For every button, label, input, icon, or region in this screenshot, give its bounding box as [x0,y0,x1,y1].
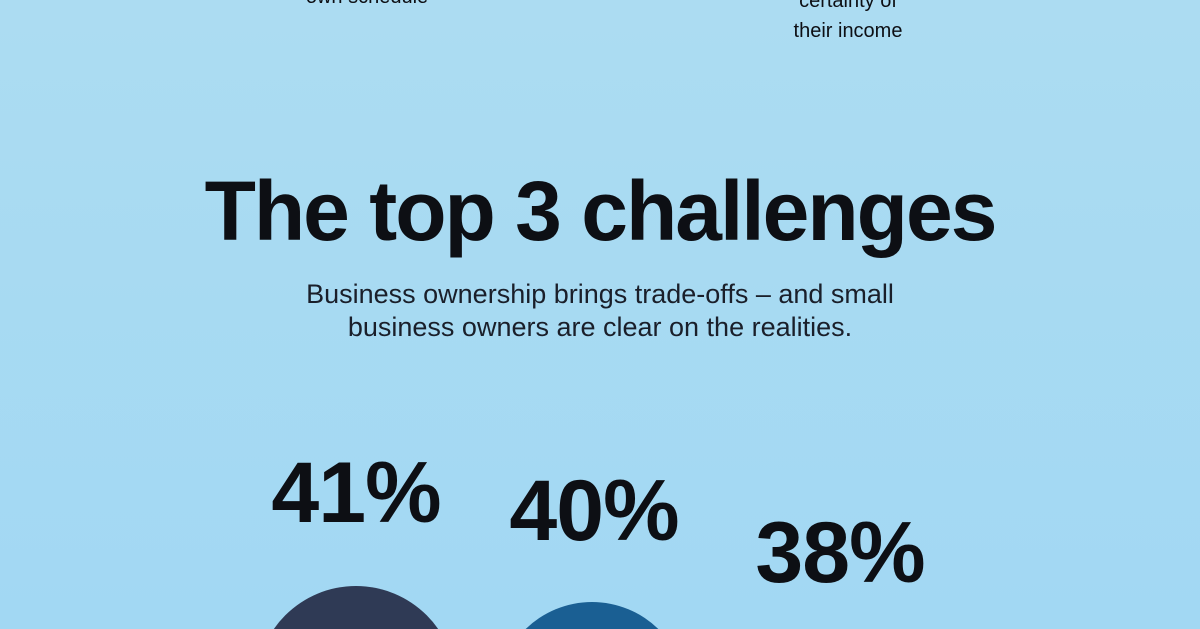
stat 41%: 41% [271,445,441,541]
title: The top 3 challenges [205,164,995,258]
circle blue [497,602,687,629]
circle navy [256,586,456,629]
text: certainty of their income: their income [794,20,902,42]
top texts (cropped at frame edge) [306,0,902,42]
circles (cropped at frame edge) [274,586,658,629]
subtitle [306,279,894,342]
stat 40%: 40% [509,463,679,559]
subtitle: Business ownership brings trade-offs – and small [306,279,894,309]
subtitle: business owners are clear on the realities. [348,312,852,342]
text: certainty of their income [794,0,902,42]
stat 38%: 38% [755,505,925,601]
